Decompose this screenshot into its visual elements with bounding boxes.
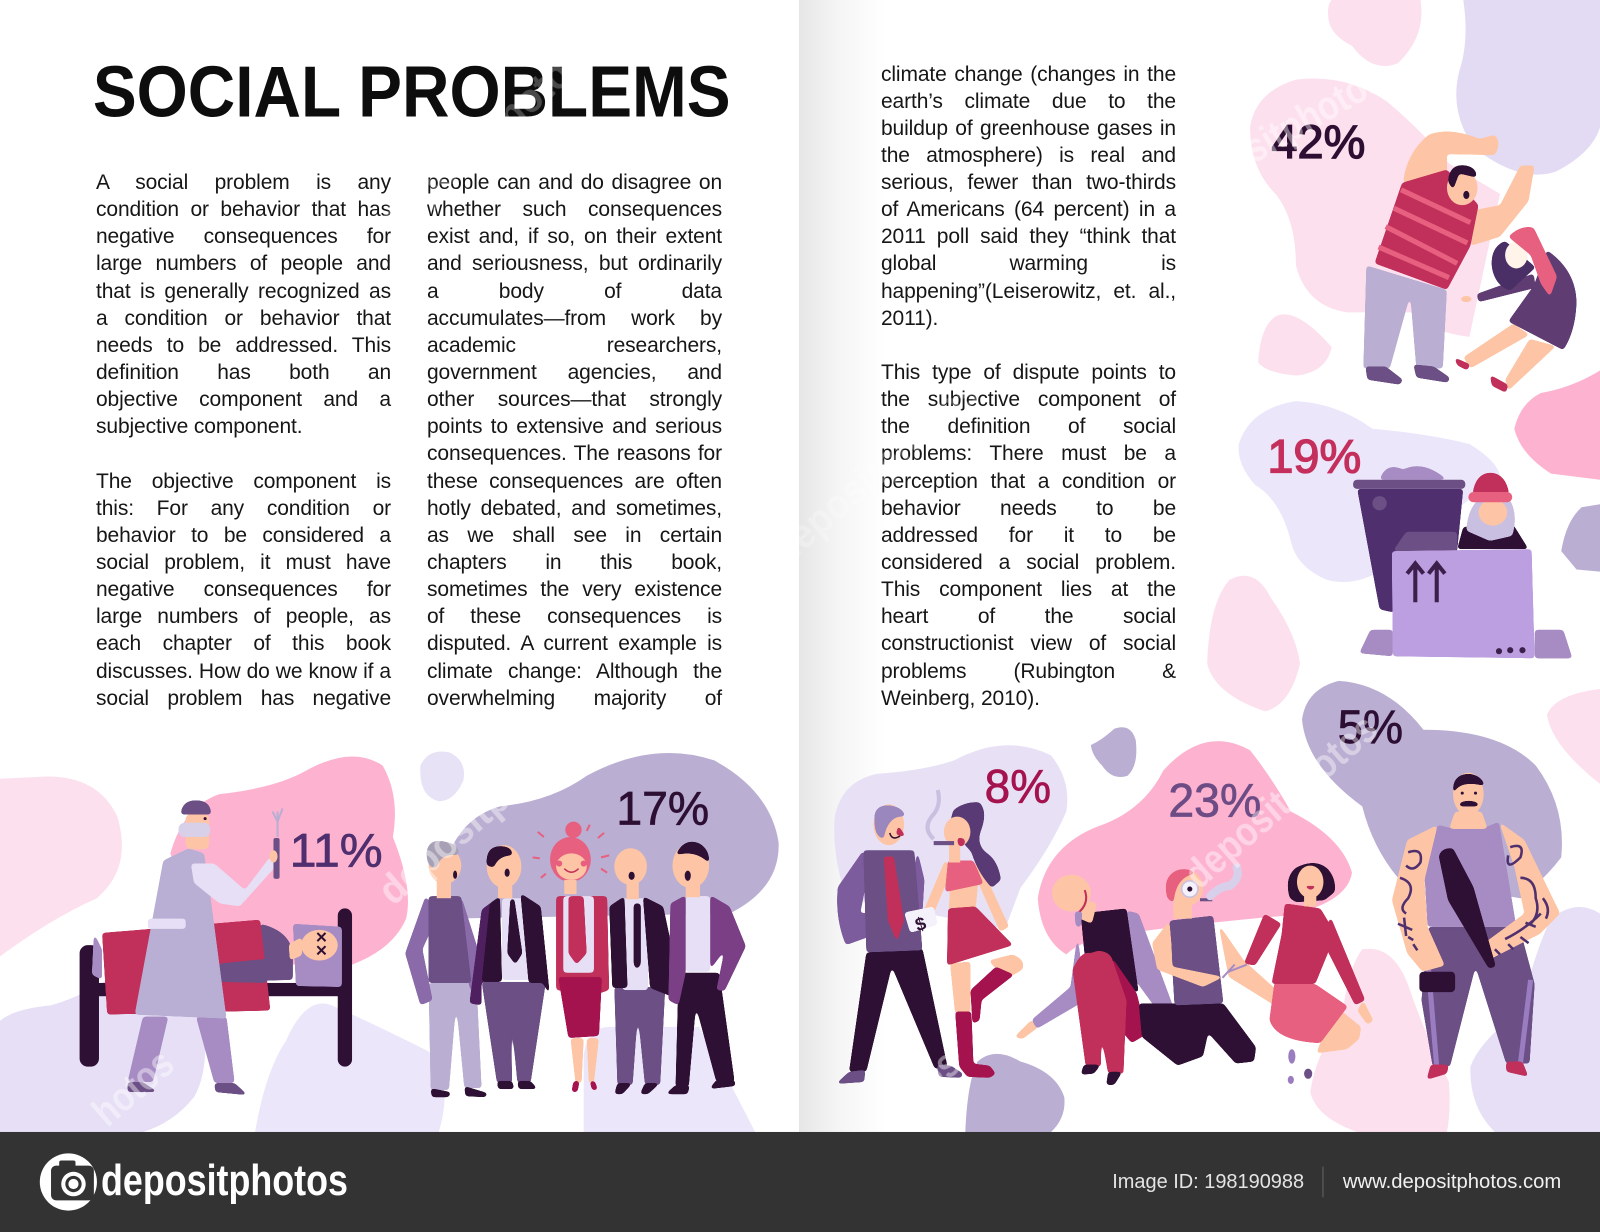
text column 3: the atmosphere) is real and xyxy=(881,144,1176,167)
figure: tattooed man with club xyxy=(1392,773,1560,1080)
book spine shadow xyxy=(799,0,886,1132)
figure: angry man and frightened woman xyxy=(1363,131,1577,393)
text column 3: problems: There must be a xyxy=(881,442,1176,465)
percentage: 8%: 8% xyxy=(985,760,1051,812)
text column 2: climate change: Although the xyxy=(427,660,722,683)
percentage: 17%: 17% xyxy=(616,783,709,835)
text column 1: A social problem is any xyxy=(96,171,391,194)
text column 3: the definition of social xyxy=(881,415,1176,438)
text column 3: the subjective component of xyxy=(881,388,1176,411)
title: SOCIAL PROBLEMS xyxy=(93,51,731,132)
text column 1: that is generally recognized as xyxy=(96,280,391,303)
text column 3: perception that a condition or xyxy=(881,470,1176,493)
percentage: 11%: 11% xyxy=(290,825,383,877)
text column 1: negative consequences for xyxy=(96,578,391,601)
watermark overlay: hotos xyxy=(869,1040,968,1135)
text column 3: earth’s climate due to the xyxy=(881,90,1176,113)
text column 3: addressed for it to be xyxy=(881,524,1176,547)
text column 3: considered a social problem. xyxy=(881,551,1176,574)
footer bar xyxy=(0,1132,1600,1232)
figure: bribe man and smoking woman xyxy=(836,790,1023,1084)
text column 3: buildup of greenhouse gases in xyxy=(881,117,1176,140)
text column 1: needs to be addressed. This xyxy=(96,334,391,357)
text column 2: a body of data xyxy=(427,280,722,303)
figure: group of five people xyxy=(405,822,746,1097)
text column 2: government agencies, and xyxy=(427,361,722,384)
text column 2: and seriousness, but ordinarily xyxy=(427,252,722,275)
text column 1: this: For any condition or xyxy=(96,497,391,520)
percentage: 42%: 42% xyxy=(1271,116,1365,168)
watermark overlay: depositphotos xyxy=(369,36,595,242)
percentage: 5%: 5% xyxy=(1338,701,1403,753)
text column 3 xyxy=(881,62,1176,710)
text column 3: serious, fewer than two-thirds xyxy=(881,171,1176,194)
figure: homeless person in box beside trash bin xyxy=(1353,466,1572,658)
watermark overlay: depositphotos xyxy=(1175,705,1386,897)
text column 3: climate change (changes in the xyxy=(881,62,1176,86)
text column 3: 2011). xyxy=(881,307,938,330)
figure: bribe man and smoking woman: $ xyxy=(912,912,929,935)
text column 2: accumulates—from work by xyxy=(427,307,722,330)
text column 1: condition or behavior that has xyxy=(96,198,391,221)
text column 2: overwhelming majority of xyxy=(427,687,722,710)
text column 1: subjective component. xyxy=(96,415,302,438)
figure: doctor and patient in bed xyxy=(80,800,352,1095)
text column 1 xyxy=(96,171,392,710)
text column 3: This component lies at the xyxy=(881,578,1176,601)
text column 2: other sources—that strongly xyxy=(427,388,722,411)
text column 1: large numbers of people, as xyxy=(96,605,391,628)
figure: smiling woman in pink dress xyxy=(1244,863,1373,1084)
text column 3: heart of the social xyxy=(881,605,1176,628)
percentage: 23%: 23% xyxy=(1168,775,1261,827)
text column 2: of these consequences is xyxy=(427,605,722,628)
text column 2: sometimes the very existence xyxy=(427,578,722,601)
text column 2: people can and do disagree on xyxy=(427,171,722,194)
text column 2: as we shall see in certain xyxy=(427,524,722,547)
text column 3: of Americans (64 percent) in a xyxy=(881,198,1176,221)
text column 3: This type of dispute points to xyxy=(881,361,1176,384)
text column 3: happening”(Leiserowitz, et. al., xyxy=(881,280,1176,303)
icon: depositphotos camera logo xyxy=(40,1153,97,1211)
text column 2: points to extensive and serious xyxy=(427,415,722,438)
text column 2: academic researchers, xyxy=(427,334,722,357)
text column 3: behavior needs to be xyxy=(881,497,1176,520)
text column 2: chapters in this book, xyxy=(427,551,722,574)
text column 1: negative consequences for xyxy=(96,225,391,248)
text column 2: consequences. The reasons for xyxy=(427,442,722,465)
text column 1: a condition or behavior that xyxy=(96,307,391,330)
figure: kneeling smoker xyxy=(1139,868,1285,1066)
text column 2: exist and, if so, on their extent xyxy=(427,225,722,248)
watermark overlay: depositphotos xyxy=(1165,55,1391,212)
watermark overlay: depositphotos xyxy=(761,368,988,573)
text column 3: problems (Rubington & xyxy=(881,660,1176,683)
text column 3: global warming is xyxy=(881,252,1176,275)
text column 1: behavior to be considered a xyxy=(96,524,391,547)
text column 3: constructionist view of social xyxy=(881,632,1176,655)
text column 2: these consequences are often xyxy=(427,470,722,493)
text column 2: hotly debated, and sometimes, xyxy=(427,497,722,520)
text column 1: definition has both an xyxy=(96,361,391,384)
image id: Image ID: 198190988 xyxy=(1112,1171,1304,1193)
text column 1: large numbers of people and xyxy=(96,252,391,275)
text column 1: social problem has negative xyxy=(96,687,391,710)
text column 1: objective component and a xyxy=(96,388,391,411)
text column 2: disputed. A current example is xyxy=(427,632,722,655)
website url: www.depositphotos.com xyxy=(1342,1171,1561,1193)
text column 2 xyxy=(427,171,722,710)
figure: bald sitting man xyxy=(1014,875,1200,1085)
percentage: 19%: 19% xyxy=(1267,431,1361,483)
watermark overlay: hotos xyxy=(83,1040,182,1135)
text column 1: The objective component is xyxy=(96,470,391,493)
text column 1: discusses. How do we know if a xyxy=(96,660,391,683)
footer brand name: depositphotos xyxy=(101,1156,348,1205)
text column 1: social problem, it must have xyxy=(96,551,391,574)
text column 2: whether such consequences xyxy=(427,198,722,221)
text column 3: Weinberg, 2010). xyxy=(881,687,1040,710)
watermark overlay: depositphotos xyxy=(369,708,595,913)
text column 1: each chapter of this book xyxy=(96,632,391,655)
text column 3: 2011 poll said they “think that xyxy=(881,225,1176,248)
